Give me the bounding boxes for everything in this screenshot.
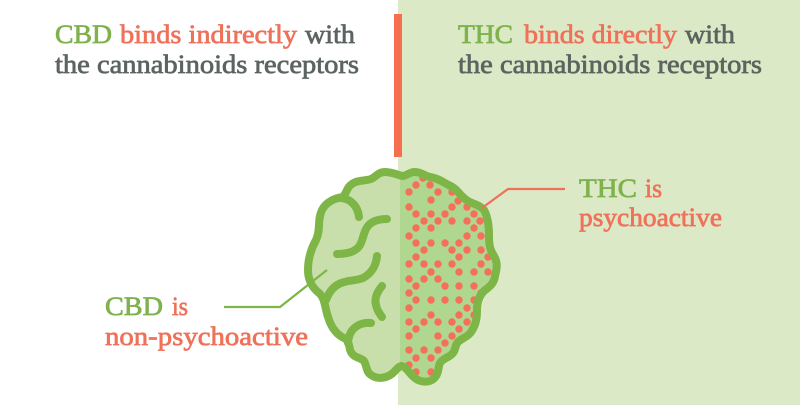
panel: THC background <box>398 0 800 405</box>
brain fill left half <box>308 172 402 378</box>
brain fill right half <box>398 172 497 382</box>
label: CBD is non-psychoactive: non-psychoactive <box>105 321 308 351</box>
label: THC is psychoactive: psychoactive <box>579 202 722 232</box>
label: CBD is non-psychoactive <box>105 291 308 351</box>
label: THC is psychoactive <box>579 173 722 232</box>
heading: THC binds directly: with <box>685 19 735 49</box>
orange divider bar <box>394 14 402 157</box>
label: CBD is non-psychoactive: CBD <box>105 291 163 321</box>
heading: CBD binds indirectly <box>55 19 359 79</box>
heading: CBD binds indirectly: CBD <box>55 19 112 49</box>
heading: CBD binds indirectly: the cannabinoids receptors <box>55 49 359 79</box>
heading: THC binds directly: binds directly <box>524 19 678 49</box>
brain outline and folds <box>308 172 497 382</box>
brain dots <box>405 174 492 376</box>
heading: THC binds directly: THC <box>458 19 513 49</box>
callout line: THC <box>482 189 565 208</box>
heading: THC binds directly <box>458 19 762 79</box>
label: CBD is non-psychoactive: is <box>172 291 188 321</box>
label: THC is psychoactive: is <box>645 173 662 203</box>
icon: brain <box>308 172 497 382</box>
callout line: CBD <box>224 270 327 307</box>
label: THC is psychoactive: THC <box>579 173 637 203</box>
heading: CBD binds indirectly: binds indirectly <box>120 19 298 49</box>
heading: CBD binds indirectly: with <box>305 19 355 49</box>
heading: THC binds directly: the cannabinoids receptors <box>458 49 762 79</box>
